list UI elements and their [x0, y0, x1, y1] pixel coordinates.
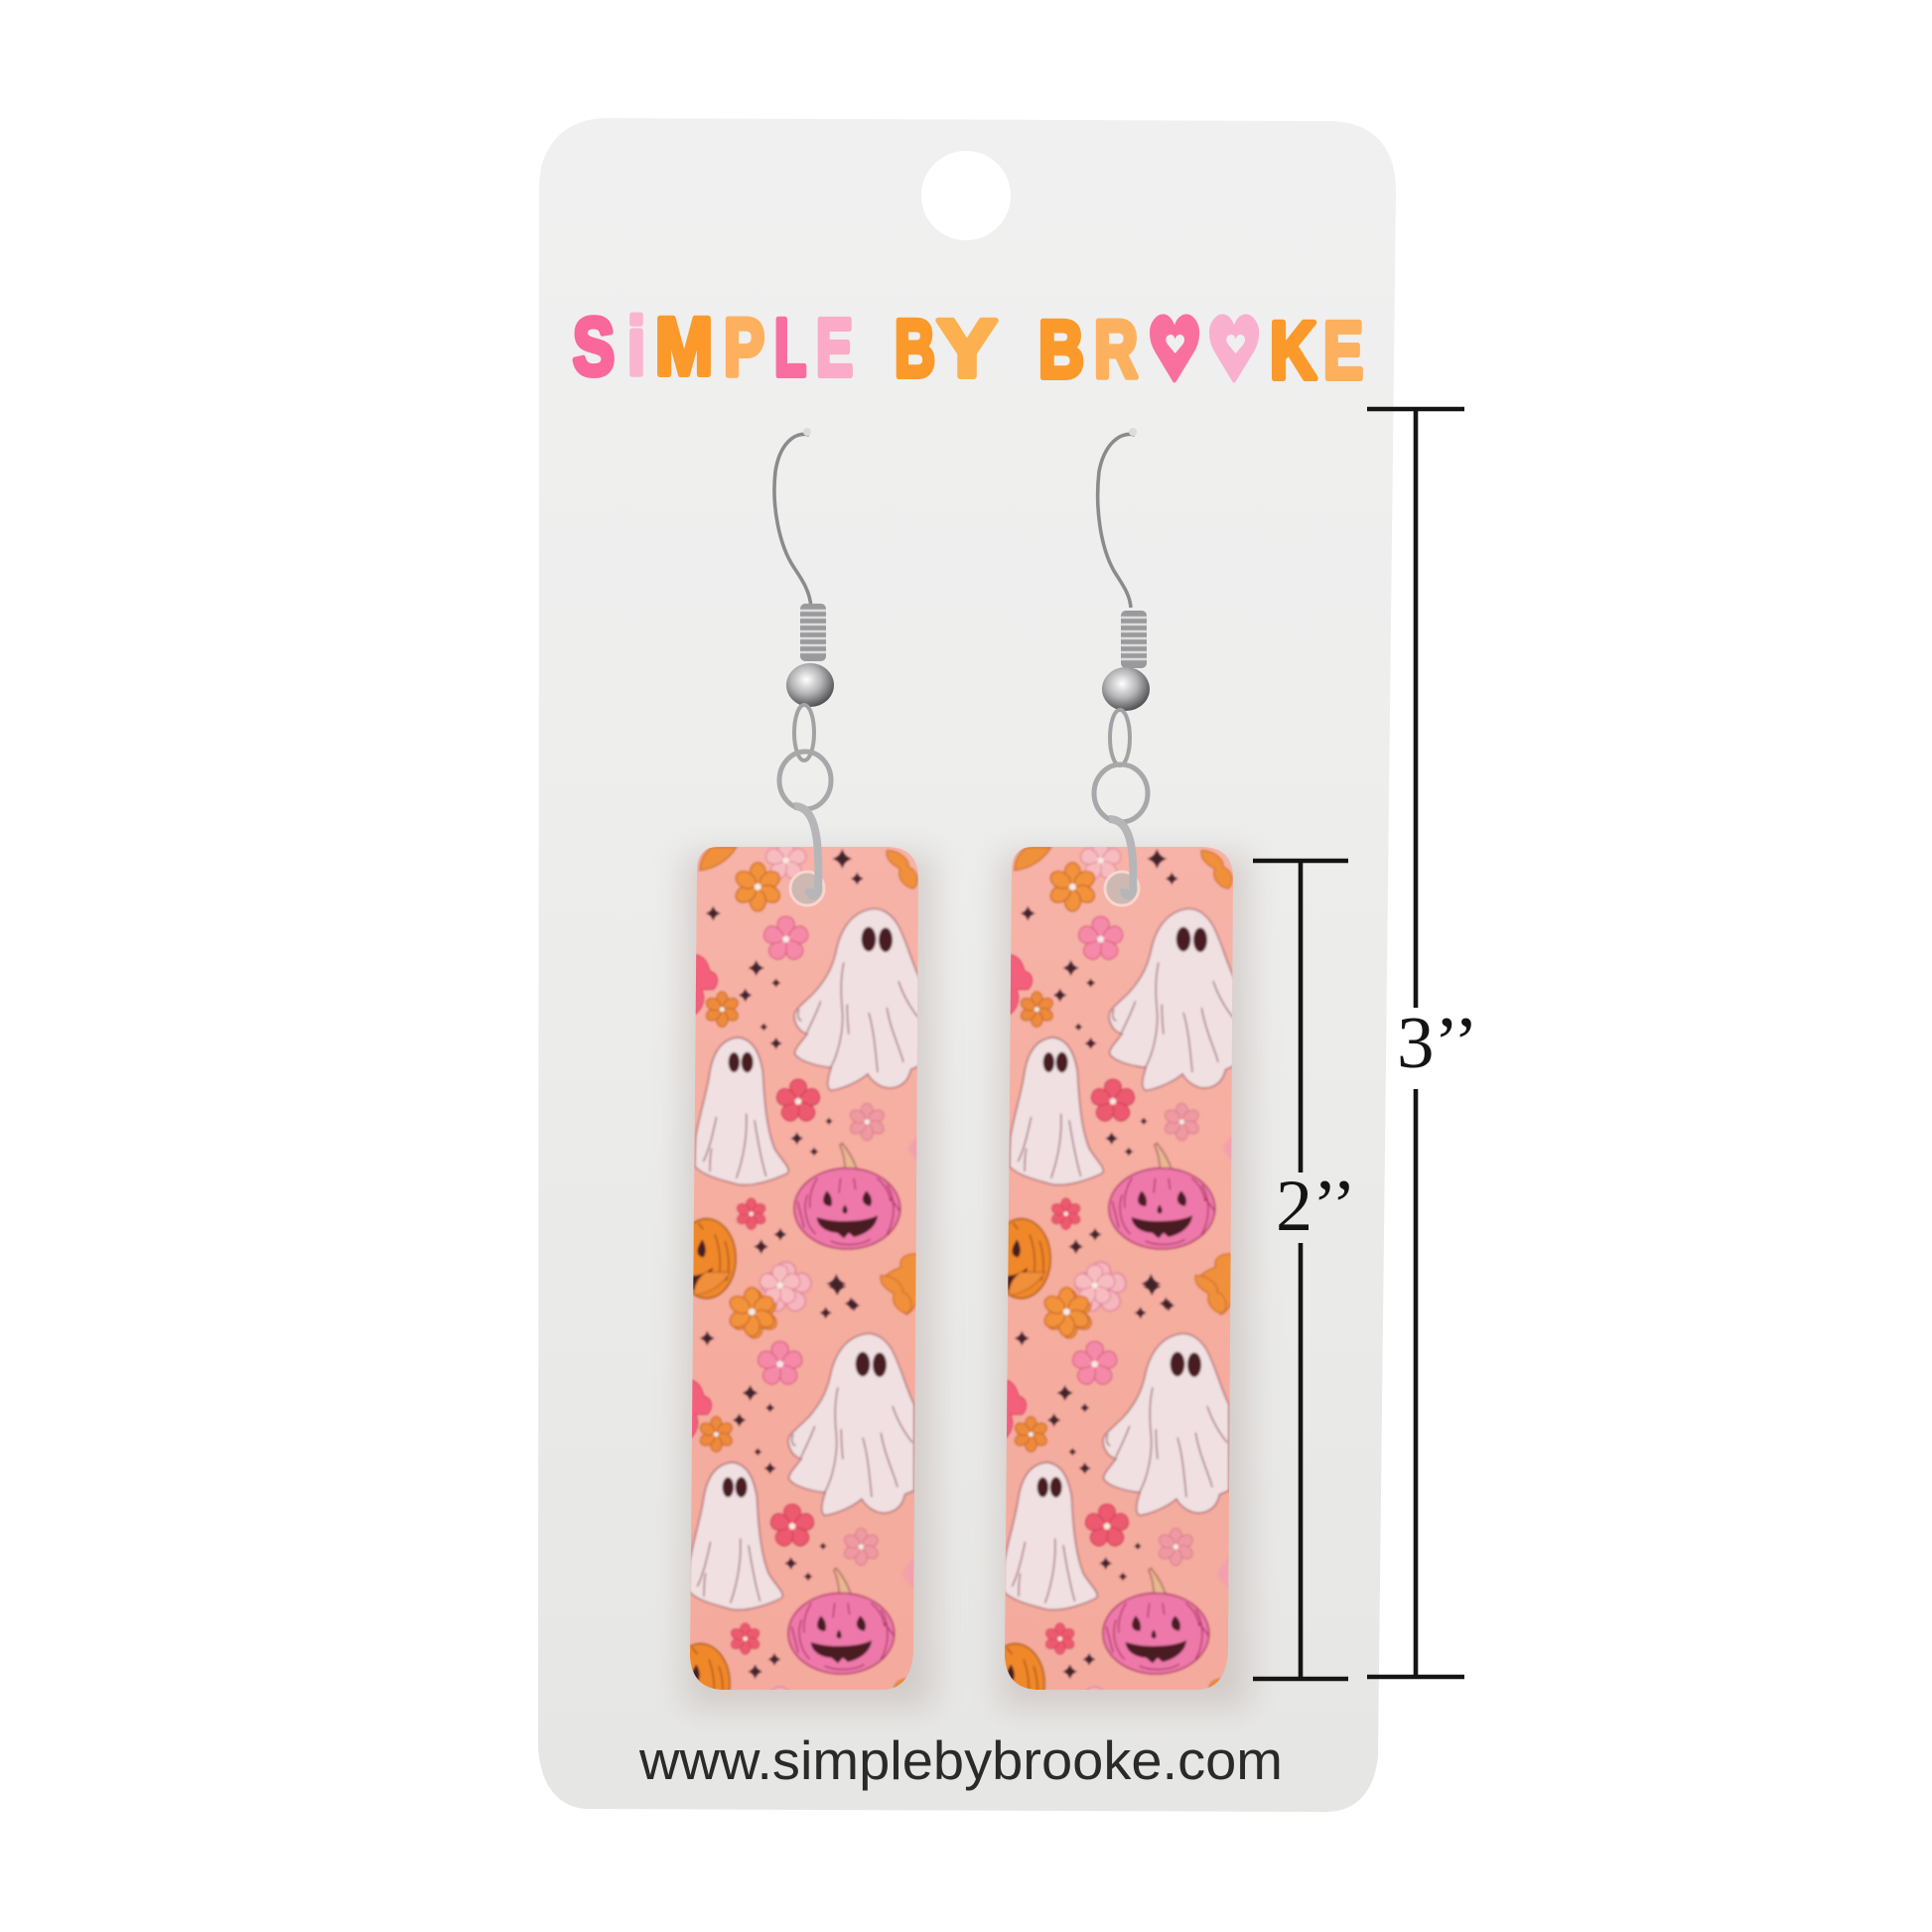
coil	[800, 604, 826, 661]
brand logo: B	[895, 304, 935, 394]
hook	[1098, 434, 1135, 608]
brand logo: ♥	[1205, 299, 1263, 401]
oval link	[1110, 710, 1130, 765]
earring shadows on card	[685, 854, 1249, 1708]
dimension: 2 inch bracket	[1253, 861, 1348, 1679]
coil	[1121, 611, 1147, 668]
brand logo: L	[774, 303, 806, 393]
brand logo: Y	[937, 304, 997, 394]
right earring drop	[986, 840, 1235, 1763]
brand logo: K	[1270, 306, 1316, 396]
panel: backing card	[538, 118, 1396, 1812]
brand logo: S	[573, 302, 615, 392]
brand logo: M	[655, 302, 713, 392]
dimension: 3 inch bracket	[1367, 409, 1464, 1677]
brand logo: E	[1323, 306, 1363, 396]
jump ring	[779, 752, 831, 809]
hook	[774, 434, 811, 608]
lower ring	[1109, 819, 1133, 896]
oval link	[794, 705, 814, 760]
brand logo: P	[724, 303, 764, 393]
jump ring	[1094, 764, 1148, 822]
dimension label: 2 inches: 2’’	[1276, 1166, 1356, 1247]
brand logo	[573, 299, 1363, 401]
brand logo: R	[1094, 305, 1138, 395]
bead	[1102, 667, 1150, 711]
brand logo: ♥	[1164, 331, 1186, 360]
brand logo: ♥	[1146, 299, 1203, 401]
bead	[786, 663, 834, 707]
dimension label: 3 inches: 3’’	[1397, 1003, 1478, 1084]
brand logo: B	[1038, 305, 1084, 395]
brand logo: ♥	[1224, 331, 1247, 360]
brand logo: E	[816, 303, 853, 393]
left earring hardware	[774, 428, 834, 896]
right earring hardware	[1094, 428, 1150, 896]
website url: www.simplebybrooke.com	[638, 1729, 1283, 1791]
lower ring	[794, 806, 818, 896]
brand logo: i	[627, 302, 645, 392]
left earring drop	[671, 840, 920, 1763]
